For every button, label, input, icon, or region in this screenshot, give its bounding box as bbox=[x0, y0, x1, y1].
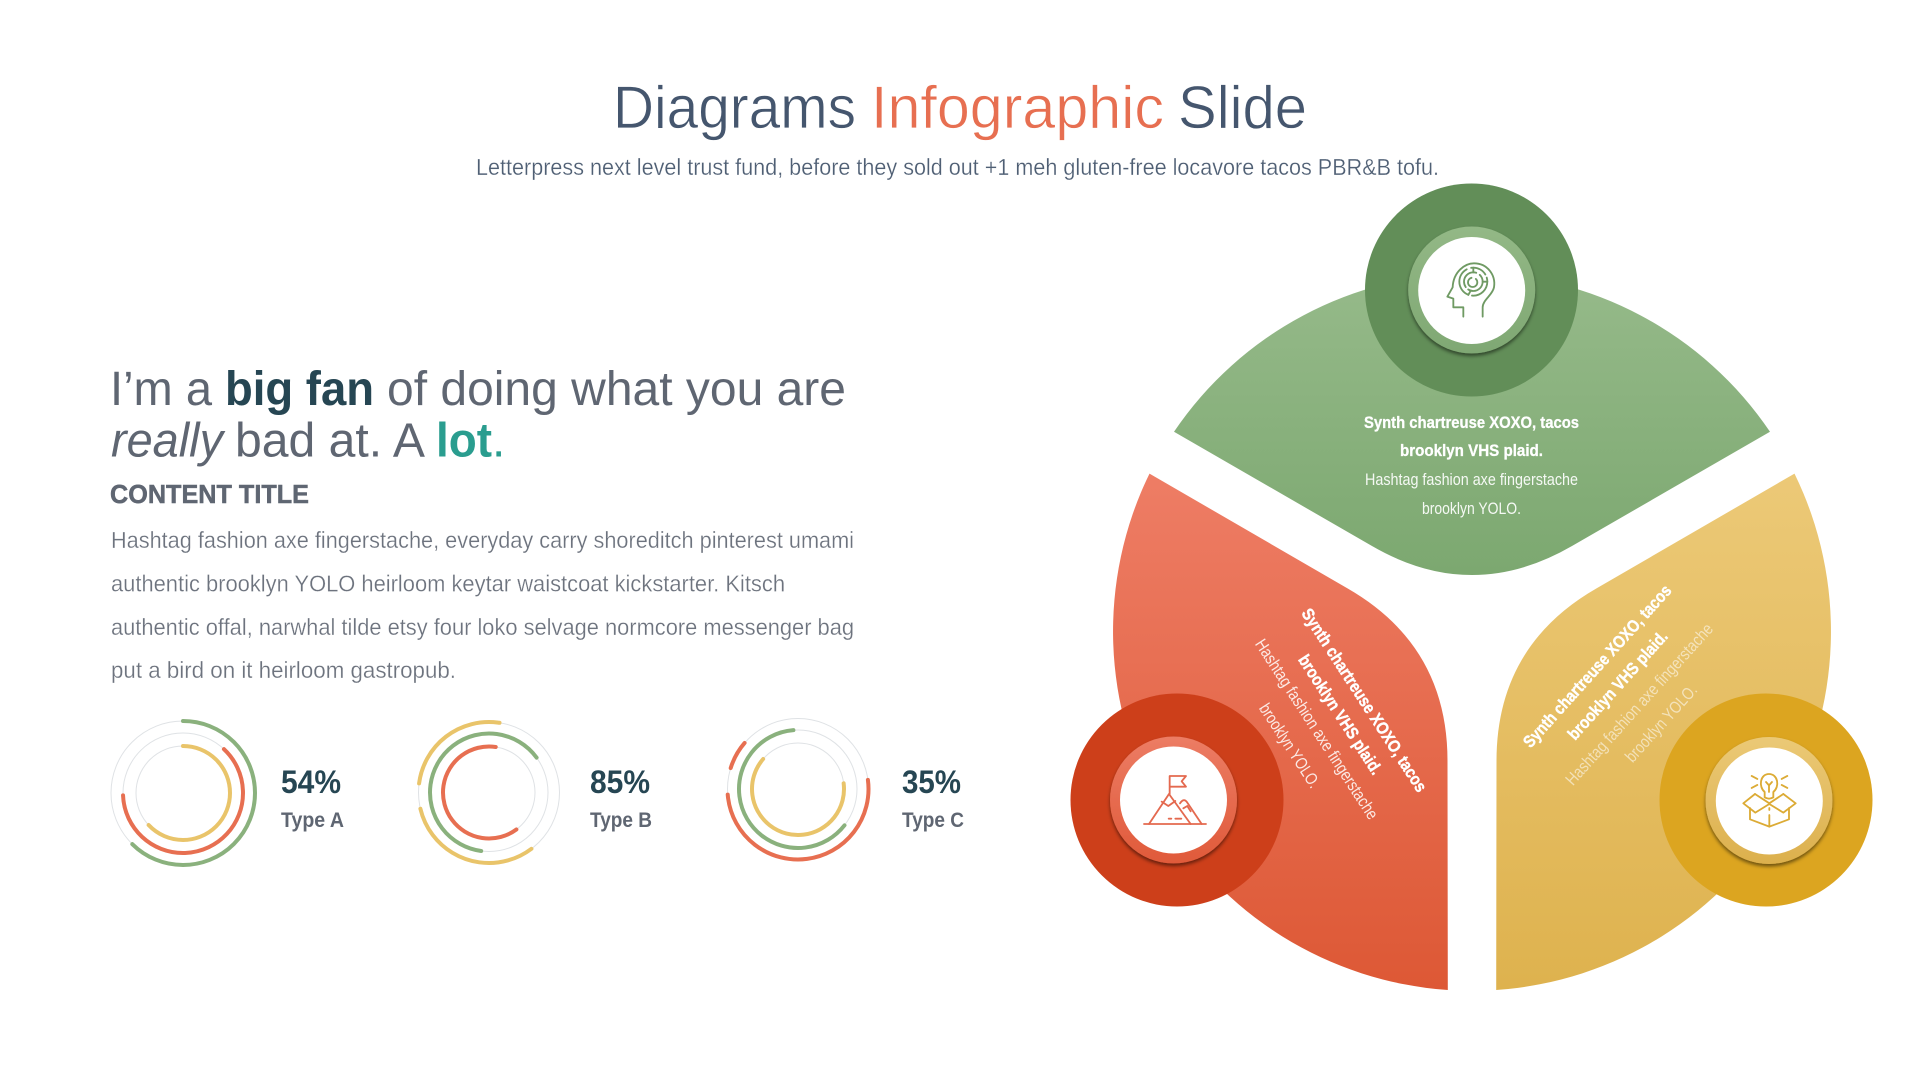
yellow petal text: brooklyn YOLO. bbox=[1622, 681, 1701, 766]
headline quote: of doing what you are bbox=[387, 363, 846, 416]
headline quote: I’m a bbox=[110, 363, 212, 416]
yellow petal text bbox=[1519, 581, 1717, 789]
stat: type A: 54% bbox=[281, 764, 341, 800]
panel: red petal bbox=[1113, 474, 1448, 990]
icon badge: yellow idea box bbox=[1660, 694, 1872, 906]
body text: put a bird on it heirloom gastropub. bbox=[111, 657, 456, 683]
body text: authentic offal, narwhal tilde etsy four loko selvage normcore messenger bag bbox=[111, 614, 854, 640]
green petal text: brooklyn VHS plaid. bbox=[1400, 441, 1543, 460]
title bbox=[613, 74, 1307, 141]
green petal text: Hashtag fashion axe fingerstache bbox=[1365, 470, 1578, 489]
body text bbox=[111, 527, 854, 683]
headline quote: really bbox=[111, 414, 226, 468]
icon badge: green head maze bbox=[1365, 184, 1578, 396]
icon: mountain with flag bbox=[1144, 776, 1206, 824]
stat: type C: Type C bbox=[902, 809, 964, 832]
red petal text: Synth chartreuse XOXO, tacos bbox=[1298, 605, 1431, 796]
stat: type A: Type A bbox=[281, 809, 344, 832]
title: Slide bbox=[1178, 74, 1307, 141]
ring chart: type C bbox=[710, 701, 886, 877]
title: Infographic bbox=[871, 74, 1164, 141]
stat: type C bbox=[902, 764, 964, 832]
headline quote: bad at. A bbox=[235, 414, 425, 468]
stat: type B: Type B bbox=[590, 809, 652, 832]
headline quote: . bbox=[492, 414, 505, 468]
ring chart: type B bbox=[390, 694, 588, 891]
headline quote bbox=[110, 363, 846, 468]
stat: type A bbox=[281, 764, 344, 832]
body text: authentic brooklyn YOLO heirloom keytar waistcoat kickstarter. Kitsch bbox=[111, 570, 785, 596]
stat: type C: 35% bbox=[902, 764, 961, 800]
stat: type B: 85% bbox=[590, 764, 650, 800]
headline quote: big fan bbox=[225, 363, 374, 416]
green petal text: brooklyn YOLO. bbox=[1422, 499, 1521, 518]
panel: green petal bbox=[1174, 273, 1770, 575]
headline quote: lot bbox=[436, 414, 492, 468]
icon: head with maze bbox=[1447, 263, 1494, 317]
yellow petal text: brooklyn VHS plaid. bbox=[1564, 627, 1672, 744]
panel: yellow petal bbox=[1496, 474, 1831, 990]
green petal text: Synth chartreuse XOXO, tacos bbox=[1364, 413, 1579, 432]
icon badge: red mountain bbox=[1070, 694, 1284, 906]
content title: CONTENT TITLE bbox=[110, 479, 309, 509]
icon: light bulb in box bbox=[1743, 774, 1796, 827]
ring chart: type A bbox=[98, 708, 268, 878]
title: Diagrams bbox=[613, 74, 856, 141]
red petal text bbox=[1251, 605, 1431, 823]
stat: type B bbox=[590, 764, 652, 832]
green petal text bbox=[1364, 413, 1579, 518]
red petal text: brooklyn YOLO. bbox=[1255, 700, 1324, 792]
subtitle: Letterpress next level trust fund, before they sold out +1 meh gluten-free locavore tacos PBR&B tofu. bbox=[476, 154, 1439, 180]
yellow petal text: Hashtag fashion axe fingerstache bbox=[1562, 620, 1717, 789]
yellow petal text: Synth chartreuse XOXO, tacos bbox=[1519, 581, 1675, 751]
red petal text: brooklyn VHS plaid. bbox=[1294, 651, 1386, 778]
red petal text: Hashtag fashion axe fingerstache bbox=[1251, 636, 1382, 823]
body text: Hashtag fashion axe fingerstache, everyday carry shoreditch pinterest umami bbox=[111, 527, 854, 553]
